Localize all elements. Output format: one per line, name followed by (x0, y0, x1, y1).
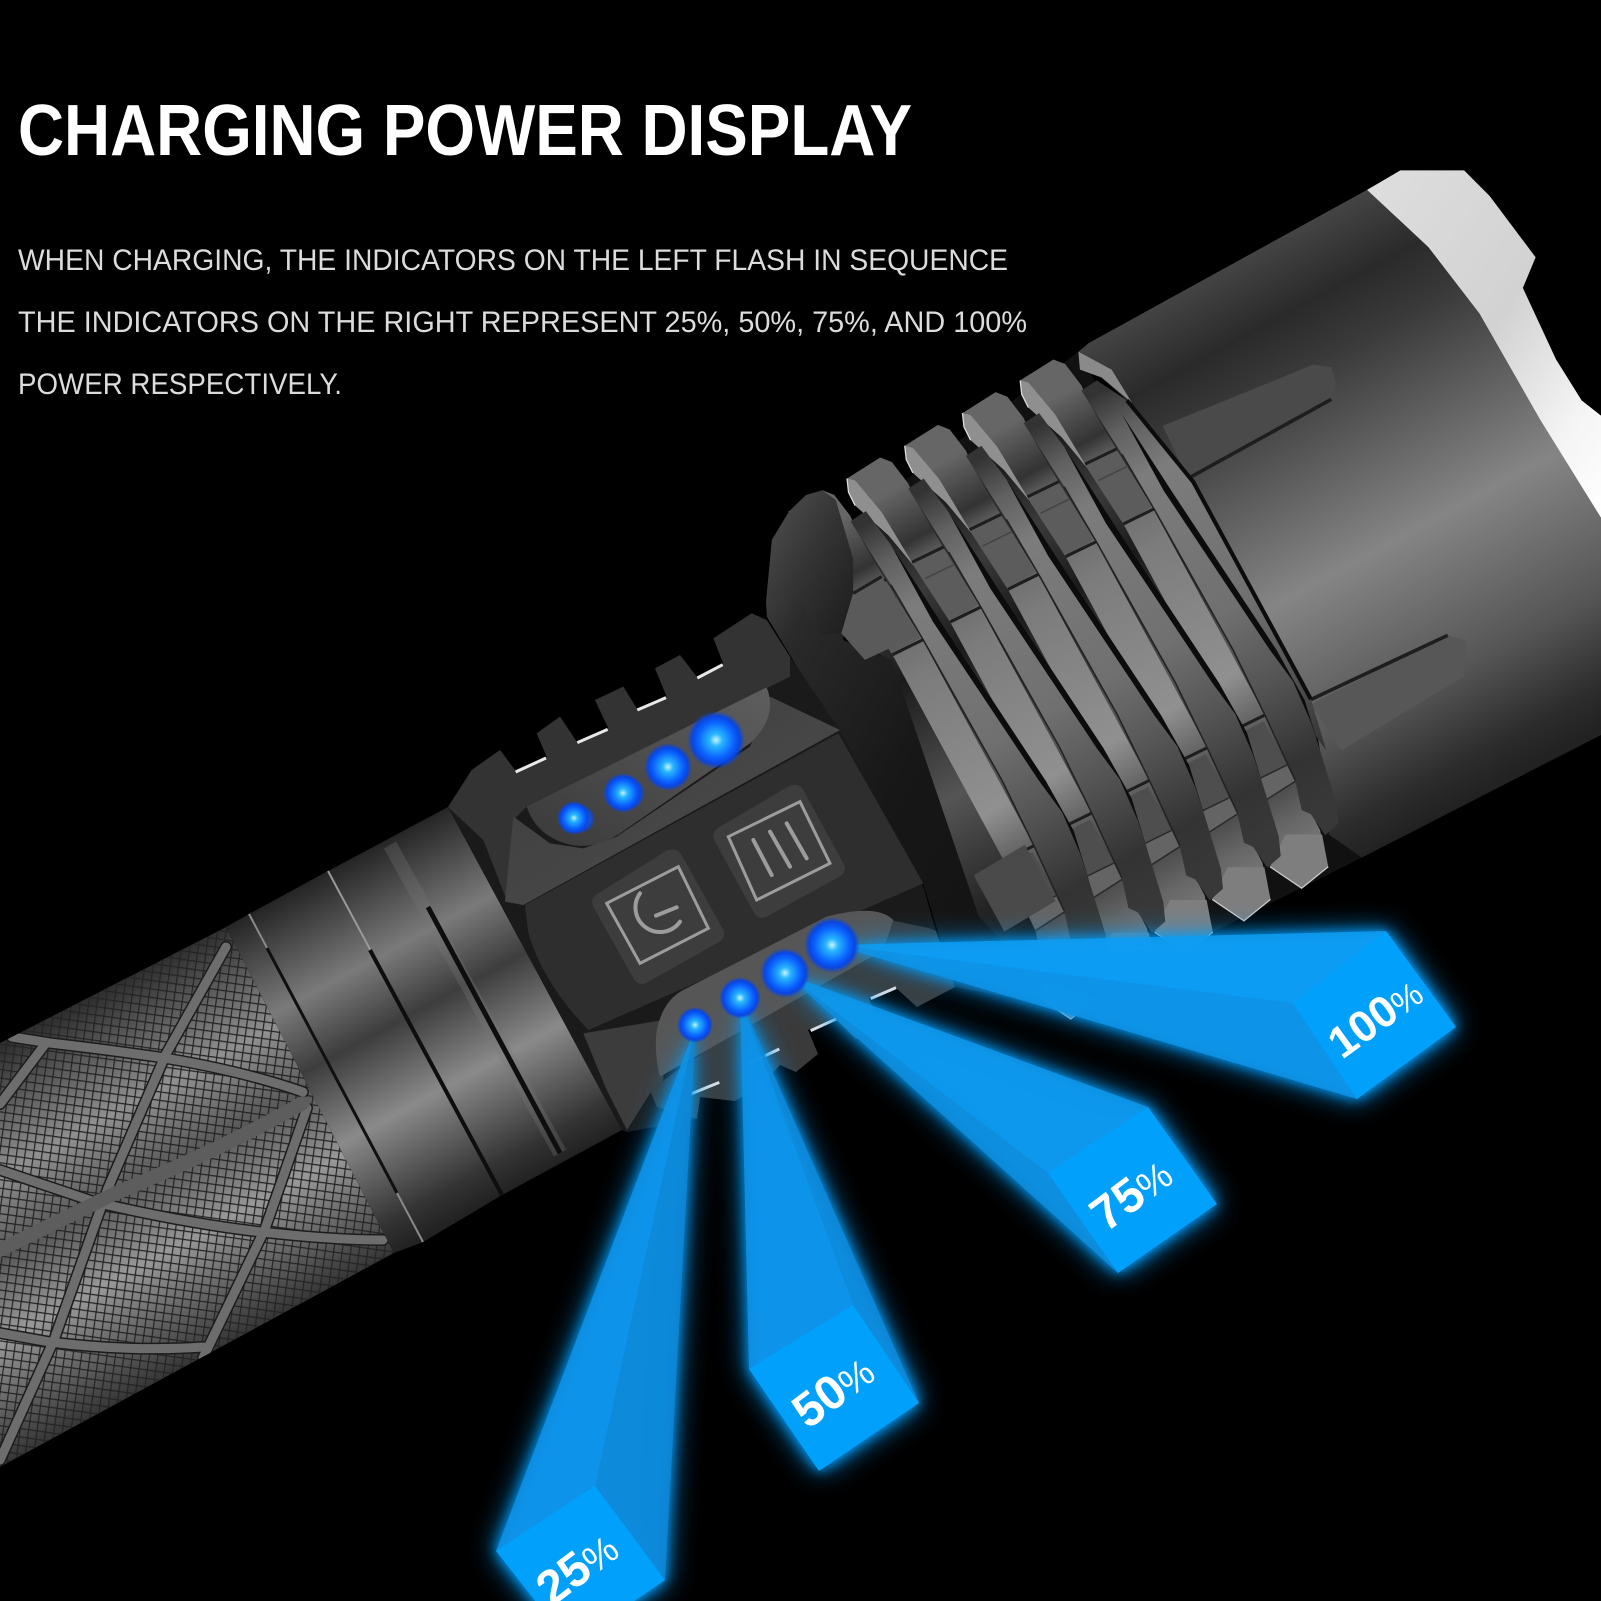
lower LED plate (656, 911, 893, 1077)
upper LED halo 1 (567, 805, 595, 833)
label 50%: 50% (783, 1344, 884, 1439)
beam 75% (786, 974, 1217, 1273)
collar ring 3 (328, 807, 622, 1195)
lower indicator LEDs (677, 917, 860, 1043)
center panel (525, 733, 923, 1030)
lower LED 100% (804, 917, 860, 973)
head lower fin (1308, 635, 1467, 750)
percentage labels (527, 968, 1432, 1601)
head upper fin (1163, 365, 1336, 480)
upper LED plate (527, 687, 770, 846)
collar bands (226, 807, 622, 1253)
head rim crescent (1078, 352, 1132, 403)
neck behind control section (766, 495, 1063, 1007)
upper LED 4 (687, 711, 745, 769)
lower LED 25% (677, 1007, 713, 1043)
title: CHARGING POWER DISPLAY (18, 91, 912, 171)
ring tab upper (841, 577, 919, 660)
description line 2: THE INDICATORS ON THE RIGHT REPRESENT 25%, 50%, 75%, AND 100% (18, 306, 1027, 339)
control section (448, 613, 955, 1132)
beam 50% (740, 998, 919, 1471)
threaded ring 5 (1020, 359, 1338, 888)
description line 3: POWER RESPECTIVELY. (18, 368, 342, 401)
lower shoulder (583, 1020, 663, 1130)
white bezel (1367, 170, 1601, 518)
top chamfer and rail (448, 613, 790, 900)
upper indicator LEDs (557, 711, 745, 835)
threaded rings and head (766, 170, 1601, 1019)
beam 25% (496, 1025, 696, 1601)
upper LED 2 (603, 773, 643, 813)
threaded ring 4 (962, 392, 1281, 921)
upper LED halo 2 (613, 777, 645, 809)
control body silhouette (448, 613, 955, 1132)
beam 100% (834, 931, 1456, 1099)
lower LED 75% (760, 948, 810, 998)
head-side flange (1097, 380, 1326, 750)
collar ring 2 (249, 871, 502, 1242)
blue callout beams (496, 931, 1456, 1601)
description line 1: WHEN CHARGING, THE INDICATORS ON THE LEFT FLASH IN SEQUENCE (18, 244, 1008, 277)
lower LED 50% (719, 977, 761, 1019)
shaft behind rings (843, 352, 1362, 1007)
upper shoulder (505, 697, 840, 905)
threaded ring 1 (789, 490, 1108, 1019)
description text (18, 244, 1027, 401)
white rail highlights lower (691, 988, 896, 1094)
neck bump (766, 490, 853, 635)
power button (592, 849, 724, 984)
label 100%: 100% (1319, 968, 1432, 1068)
white rail highlights upper (516, 665, 723, 772)
head barrel (1078, 190, 1601, 858)
collar ring 1 (226, 914, 423, 1253)
upper LED 1 (557, 801, 591, 835)
mode button (713, 785, 845, 918)
knurled grip (0, 920, 400, 1470)
label 75%: 75% (1081, 1147, 1182, 1242)
lower rail (650, 920, 955, 1119)
ring tab lower (974, 845, 1055, 932)
threaded ring 3 (905, 425, 1223, 954)
upper LED 3 (644, 743, 692, 791)
threaded ring 2 (847, 458, 1165, 986)
